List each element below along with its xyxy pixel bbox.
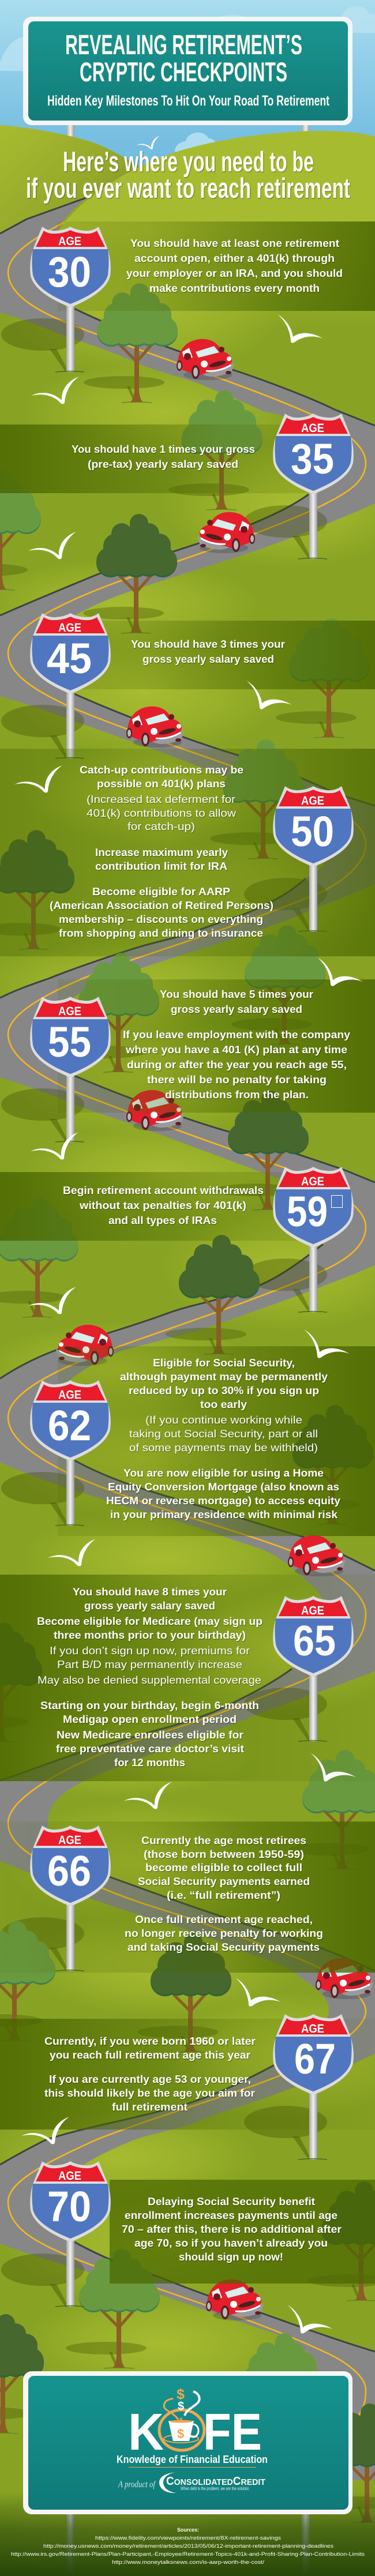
logo: KOFE: FE <box>203 2404 262 2461</box>
divider <box>129 2467 256 2468</box>
text: age 50: for catch-up) <box>127 820 195 832</box>
text: age 65: Part B/D may permanently increase <box>57 1658 242 1670</box>
shield: age 45: 45 <box>47 634 92 682</box>
shield: age 67: AGE <box>301 2022 324 2036</box>
text: age 30: You should have at least one retirement <box>130 237 339 249</box>
shield: age 59: AGE <box>301 1175 324 1188</box>
text: age 50: 401(k) contributions to allow <box>87 807 237 819</box>
text: age 45 <box>131 638 285 665</box>
text: age 62: too early <box>200 1398 247 1410</box>
panel: age 45 <box>30 613 375 758</box>
birds <box>14 314 363 2333</box>
text: age 30: account open, either a 401(k) through <box>134 252 335 264</box>
shield: age 67: 67 <box>294 2035 336 2083</box>
text: age 65: May also be denied supplemental coverage <box>38 1674 261 1686</box>
intro heading <box>26 147 350 204</box>
clouds <box>0 6 375 152</box>
text: age 59: without tax penalties for 401(k) <box>79 1199 246 1211</box>
shield: age 70: AGE <box>58 2169 81 2183</box>
cars <box>56 339 373 2320</box>
text: age 45: You should have 3 times your <box>131 638 285 650</box>
text: age 66: become eligible to collect full <box>145 1861 302 1873</box>
text: age 62: although payment may be permanently <box>120 1370 328 1383</box>
text: age 65: three months prior to your birthday) <box>54 1629 246 1641</box>
text: age 62: You are now eligible for using a Home <box>123 1467 324 1479</box>
text: age 59: Begin retirement account withdrawals <box>63 1184 264 1196</box>
text: age 45: gross yearly salary saved <box>142 653 274 665</box>
text: age 66: no longer receive penalty for working <box>125 1927 323 1939</box>
text: age 50: (Increased tax deferment for <box>87 793 235 805</box>
text: age 50: Catch-up contributions may be <box>80 764 243 776</box>
text: age 65: Become eligible for Medicare (may sign up <box>37 1615 262 1627</box>
shield: age 55 <box>30 997 111 1142</box>
shield: age 62: AGE <box>58 1388 81 1402</box>
text: age 55: distributions from the plan. <box>165 1088 309 1101</box>
shield: age 65 <box>273 1596 354 1741</box>
text: age 62: of some payments may be withheld) <box>129 1441 318 1454</box>
footer sign <box>23 2371 352 2514</box>
panel: age 50 <box>0 749 375 956</box>
logo: KOFE: $ <box>178 2400 184 2413</box>
sources: Sources: <box>177 2527 199 2533</box>
text: age 67: this should likely be the age you aim for <box>44 2087 255 2099</box>
sign shadows <box>1 318 327 2307</box>
shield: age 59 <box>273 1167 354 1312</box>
text: age 65: New Medicare enrollees eligible for <box>57 1729 243 1741</box>
shield: age 30: AGE <box>58 235 81 248</box>
right hill <box>58 131 375 231</box>
panel: age 30 <box>30 221 375 372</box>
text: age 65: gross yearly salary saved <box>84 1599 215 1612</box>
logo: KOFE: $ <box>177 2386 185 2402</box>
text: age 50: possible on 401(k) plans <box>97 778 226 790</box>
logo: KOFE: K <box>128 2404 164 2461</box>
panel: age 67 <box>0 2014 375 2160</box>
shield: age 35 <box>273 414 354 559</box>
logo: Consolidated Credit: When debt is the problem, we are the solution. <box>181 2486 250 2491</box>
text: age 50: Become eligible for AARP <box>92 885 230 898</box>
text: age 55: If you leave employment with the company <box>123 1028 351 1041</box>
sources <box>11 2527 365 2566</box>
text: age 62: Equity Conversion Mortgage (also known as <box>108 1481 339 1493</box>
shield: age 70 <box>30 2161 111 2307</box>
text: age 70: age 70, so if you haven’t already you <box>134 2237 328 2249</box>
left hill <box>0 125 150 254</box>
text: age 62: taking out Social Security, part or all <box>129 1428 318 1440</box>
shield: age 35: 35 <box>291 435 334 483</box>
background: sky <box>0 0 375 185</box>
logo: KOFE: $ <box>179 2417 183 2424</box>
text: age 62: (If you continue working while <box>145 1414 302 1426</box>
text: age 50: Increase maximum yearly <box>95 846 228 858</box>
shield: age 50 <box>273 786 354 932</box>
text: age 50: (American Association of Retired Persons) <box>50 899 273 911</box>
text: age 30: make contributions every month <box>149 282 320 294</box>
text: age 65: Starting on your birthday, begin 6-month <box>40 1699 259 1711</box>
text: age 59: and all types of IRAs <box>108 1214 217 1226</box>
title <box>65 30 302 87</box>
shield: age 62: 62 <box>48 1402 91 1450</box>
shield: age 35: AGE <box>301 422 324 435</box>
text: age 66: Social Security payments earned <box>138 1875 310 1887</box>
text: age 62: reduced by up to 30% if you sign up <box>129 1384 319 1396</box>
text: age 30 <box>126 237 343 294</box>
text: age 66: (i.e. “full retirement”) <box>167 1889 280 1901</box>
header sign posts <box>66 125 310 171</box>
text: age 70: enrollment increases payments until age <box>125 2209 337 2221</box>
shield: age 66 <box>30 1826 111 1971</box>
shield: age 55: AGE <box>58 1005 81 1018</box>
sources: http://money.usnews.com/money/retirement/articles/2013/05/06/12-important-retirement-planning-deadlines <box>43 2543 333 2549</box>
text: age 66: and taking Social Security payments <box>127 1941 320 1953</box>
bird: sky <box>136 136 160 149</box>
text: age 55 <box>123 988 351 1101</box>
text: age 55: during or after the year you reach age 55, <box>127 1058 347 1071</box>
text: age 50: membership – discounts on everything <box>59 913 263 925</box>
text: age 59 <box>63 1184 264 1226</box>
text: age 55: where you have a 401 (K) plan at any time <box>125 1043 347 1056</box>
shield: age 70: 70 <box>47 2183 91 2230</box>
panel: age 62 <box>30 1346 375 1536</box>
text: age 65: Medigap open enrollment period <box>63 1713 237 1725</box>
text: age 70: Delaying Social Security benefit <box>148 2195 315 2207</box>
text: age 55: gross yearly salary saved <box>171 1003 302 1015</box>
shield: age 59: 59 <box>287 1188 328 1236</box>
shield: age 66: AGE <box>58 1834 81 1847</box>
text: age 66: Once full retirement age reached, <box>135 1913 313 1925</box>
text: age 67: you reach full retirement age this year <box>50 2049 250 2061</box>
shield: age 50: 50 <box>291 808 334 855</box>
logo: Consolidated Credit <box>159 2472 265 2493</box>
panel: age 65 <box>0 1575 375 1781</box>
text: age 70 <box>122 2195 342 2263</box>
text: age 35: You should have 1 times your gross <box>72 443 255 455</box>
text: age 35 <box>72 443 255 470</box>
text: age 67: full retirement <box>112 2101 187 2113</box>
bottom shade and sign posts <box>0 2492 375 2576</box>
shield: age 67 <box>273 2014 354 2160</box>
shield: age 65: AGE <box>301 1604 324 1617</box>
panel: age 66 <box>0 1822 375 1973</box>
text: age 65: free preventative care doctor’s visit <box>56 1743 244 1755</box>
panel: age 59 <box>0 1167 354 1312</box>
shield: age 45 <box>30 613 111 758</box>
sources: https://www.fidelity.com/viewpoints/retirement/8X-retirement-savings <box>95 2535 281 2541</box>
text: age 70: 70 – after this, there is no additional after <box>122 2223 342 2235</box>
text: age 50: from shopping and dining to insurance <box>59 927 263 939</box>
panel: age 55 <box>30 979 375 1142</box>
text: age 62: HECM or reverse mortgage) to access equity <box>106 1494 341 1507</box>
text: age 62: Eligible for Social Security, <box>153 1357 295 1369</box>
logo tagline: Knowledge of Financial Education <box>117 2454 268 2465</box>
text: age 66: Currently the age most retirees <box>141 1834 306 1846</box>
shield: age 65: 65 <box>293 1617 336 1665</box>
text: age 62: in your primary residence with minimal risk <box>110 1508 338 1520</box>
text: age 67: Currently, if you were born 1960 or later <box>44 2035 256 2047</box>
text: age 67: If you are currently age 53 or younger, <box>49 2073 251 2085</box>
text: age 30: your employer or an IRA, and you should <box>126 267 343 279</box>
text: age 65: for 12 months <box>114 1756 185 1768</box>
product credit: A product of <box>118 2480 156 2489</box>
header sign <box>23 17 352 125</box>
panel: age 35 <box>0 414 354 559</box>
text: age 70: should sign up now! <box>179 2251 283 2263</box>
text: age 50 <box>50 764 273 939</box>
text: age 55: You should have 5 times your <box>160 988 313 1000</box>
shield: age 55: 55 <box>48 1018 91 1066</box>
logo: Consolidated Credit: CONSOLIDATEDCREDIT <box>166 2475 265 2488</box>
text: age 62 <box>106 1357 341 1520</box>
text: age 65: If you don’t sign up now, premiums for <box>50 1644 250 1657</box>
text: age 35: (pre-tax) yearly salary saved <box>88 458 238 470</box>
text: age 66: (those born between 1950-59) <box>144 1848 304 1860</box>
shield: age 45: AGE <box>58 621 81 634</box>
text: age 50: contribution limit for IRA <box>95 860 227 872</box>
text: age 65 <box>37 1586 262 1768</box>
shield: age 66: 66 <box>47 1847 91 1895</box>
shield: age 30 <box>30 227 111 372</box>
text: age 55: there will be no penalty for taking <box>147 1073 327 1086</box>
text: age 66 <box>125 1834 323 1953</box>
logo: KOFE <box>128 2386 262 2461</box>
shield: age 30: 30 <box>48 248 91 296</box>
ground blend <box>58 231 375 329</box>
shield: age 62 <box>30 1380 111 1526</box>
text: age 65: You should have 8 times your <box>73 1586 227 1598</box>
panel: age 70 <box>30 2161 375 2307</box>
shield: age 50: AGE <box>301 794 324 808</box>
text: age 67 <box>44 2035 256 2113</box>
sources: http://www.moneytalksnews.com/is-aarp-worth-the-cost/ <box>112 2559 264 2566</box>
logo: KOFE: $ <box>177 2427 184 2441</box>
sources: http://www.irs.gov/Retirement-Plans/Plan-Participant,-Employee/Retirement-Topics-401k-and-Profit-Sharing-Plan-Contribution-Limits <box>11 2551 365 2558</box>
